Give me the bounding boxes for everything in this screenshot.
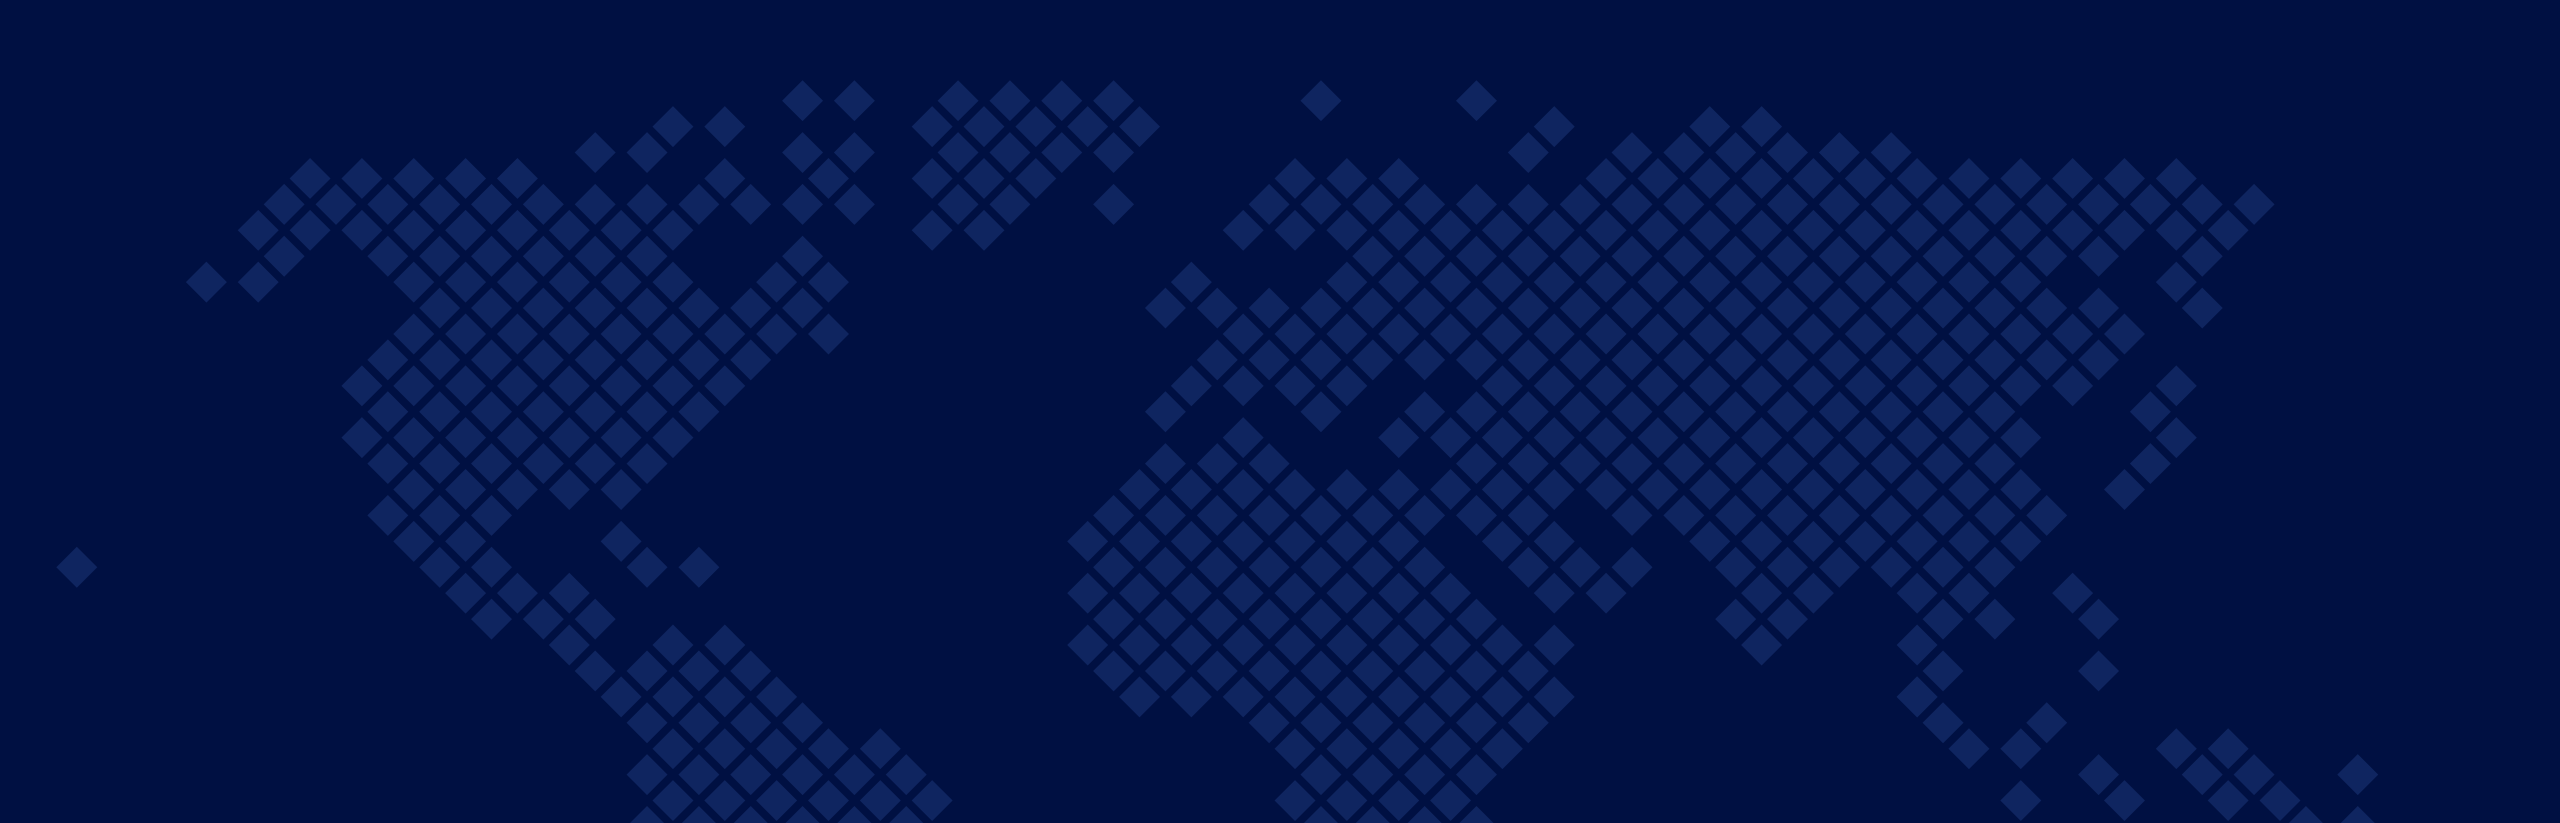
Southeast Asia islands and Oceania [1943,723,2358,823]
world map made of diamonds [77,101,2358,823]
South America [569,645,932,823]
Europe and Asia [1165,101,2254,697]
Greenland [932,101,1140,230]
North America with Arctic islands, Central America and Hawaii [77,101,854,619]
Africa [1088,490,1554,823]
